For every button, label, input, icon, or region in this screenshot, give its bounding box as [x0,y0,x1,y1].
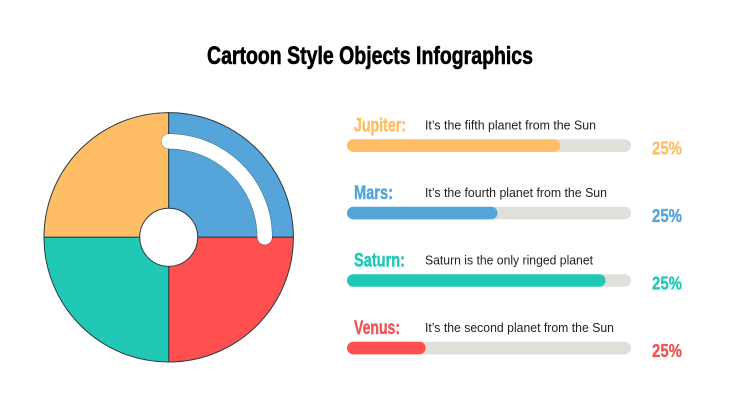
value: Mars: 25% [652,206,682,226]
progress fill: Venus [347,342,426,354]
label: Venus: Venus: [354,318,400,339]
label: Jupiter: Jupiter: [354,116,406,136]
progress fill: Saturn [347,274,606,287]
segment: Venus [169,237,293,362]
progress track: Mars [347,207,631,219]
row: Jupiter [347,116,682,158]
segment: Jupiter [44,113,169,237]
white highlight arc [169,141,265,237]
description: Saturn: Saturn is the only ringed planet [425,254,594,268]
donut chart [44,113,293,362]
label: Saturn: Saturn: [354,250,405,272]
row: Mars [347,183,682,226]
progress track: Jupiter [347,139,631,152]
title: Cartoon Style Objects Infographics [207,42,533,70]
segment: Mars [169,113,293,237]
description: Venus: It’s the second planet from the Sun [425,321,614,335]
progress track: Saturn [347,274,631,287]
value: Saturn: 25% [652,274,682,294]
value: Venus: 25% [652,341,682,361]
label: Mars: Mars: [354,183,393,204]
description: Mars: It’s the fourth planet from the Sun [425,186,607,200]
value: Jupiter: 25% [652,138,682,158]
segment: Saturn [44,237,169,362]
centre hole [140,208,198,266]
row: Saturn [347,250,682,294]
description: Jupiter: It’s the fifth planet from the Sun [425,118,596,132]
progress fill: Mars [347,207,498,219]
row: Venus [347,318,682,361]
progress fill: Jupiter [347,139,560,152]
progress track: Venus [347,342,631,354]
